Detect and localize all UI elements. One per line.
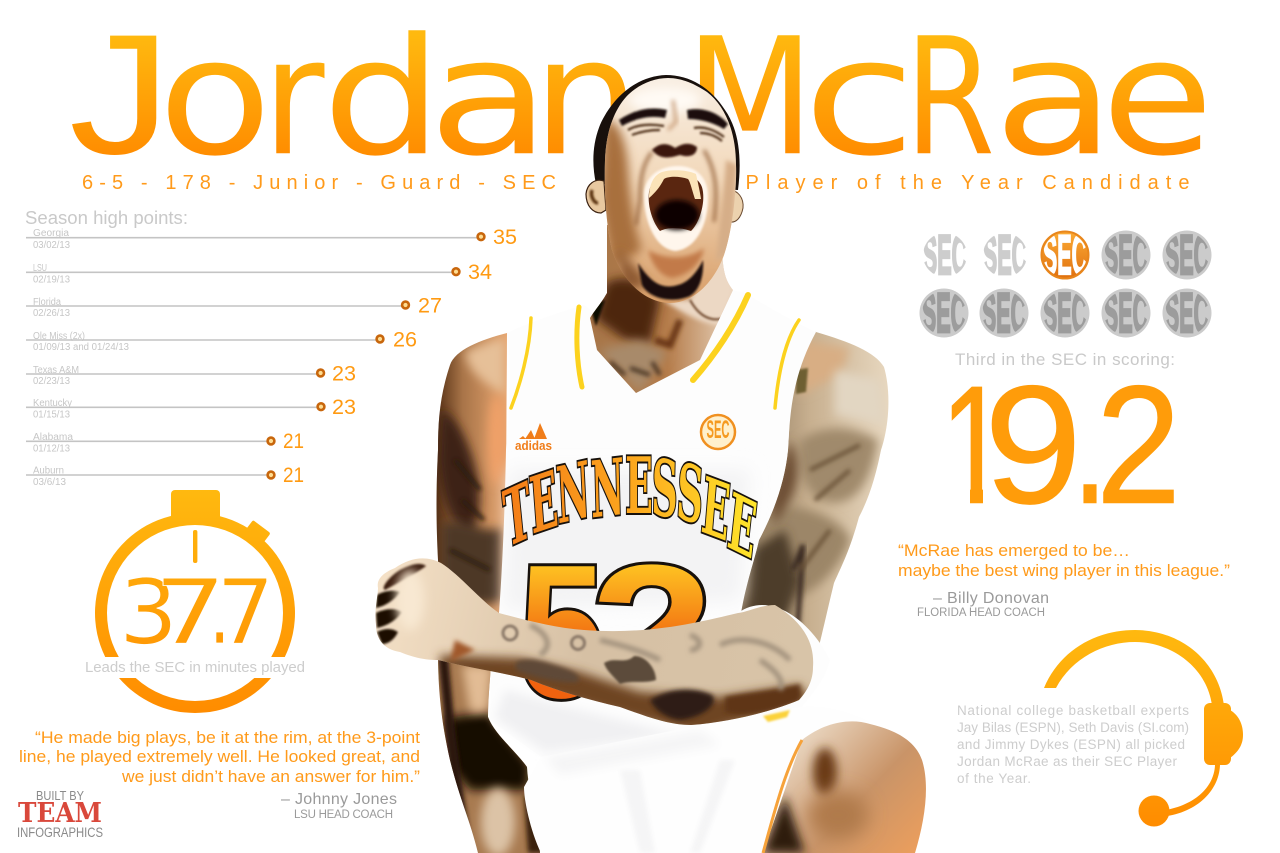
nose shadow <box>652 144 697 157</box>
stat: 37.7: . <box>208 560 231 664</box>
row: Kentucky 23: 23 <box>332 396 356 419</box>
heading: third in SEC: Third in the SEC in scoring: <box>955 350 1175 369</box>
row: Florida 27: 27 <box>418 294 442 318</box>
panel: headset experts <box>957 630 1243 826</box>
stat: 37.7: 7 <box>216 560 274 664</box>
icon: SEC 5: SEC <box>1165 224 1209 286</box>
quote: Johnny Jones <box>19 728 420 821</box>
row: Alabama 21: Alabama <box>33 432 73 443</box>
lips <box>644 166 708 251</box>
illustration: player Jordan McRae <box>375 75 926 853</box>
lower forearm shading <box>440 655 810 735</box>
chin shadow <box>648 248 704 278</box>
row: Auburn 21: 03/6/13 <box>33 477 66 488</box>
right ear <box>727 190 743 222</box>
title: M <box>685 4 814 192</box>
brows <box>619 108 667 126</box>
icon: SEC 3 highlighted: SEC <box>1043 224 1087 286</box>
adidas logo: adidas <box>515 438 552 453</box>
text: experts note: and Jimmy Dykes (ESPN) all picked <box>957 737 1185 752</box>
beard <box>638 260 703 300</box>
panel: SEC icons rank <box>920 230 1212 338</box>
row: Auburn 21: 21 <box>283 464 304 487</box>
row: Auburn 21: Auburn <box>33 466 64 476</box>
forearm tattoos <box>516 659 579 682</box>
jersey SEC patch <box>701 415 735 449</box>
icon: headset <box>1044 630 1243 826</box>
row: Texas A&M 23: Texas A&M <box>33 365 79 376</box>
row: LSU 34: 02/19/13 <box>33 274 70 286</box>
right forearm and fist <box>375 558 813 735</box>
stat: 19.2: 2 <box>1096 351 1181 539</box>
logo: built by team infographics: INFOGRAPHICS <box>17 824 103 840</box>
text: experts note <box>957 703 1189 786</box>
row: Georgia 35: 35 <box>493 226 517 249</box>
row: Florida 27 <box>26 294 442 319</box>
row: Kentucky 23: 01/15/13 <box>33 410 70 420</box>
neck and chest <box>590 225 733 393</box>
row: Florida 27: 02/26/13 <box>33 308 70 319</box>
title: r <box>263 4 325 192</box>
icon: SEC 9: SEC <box>1104 282 1148 344</box>
subtitle right: Player of the Year Candidate <box>746 172 1190 194</box>
quote: Johnny Jones: – Johnny Jones <box>281 791 397 808</box>
title: a <box>993 4 1116 192</box>
stat: 37.7: 3 <box>119 560 178 664</box>
jersey stripes <box>511 295 799 408</box>
title: e <box>1101 4 1214 192</box>
title: a <box>428 4 551 192</box>
jersey SEC patch: SEC <box>706 416 730 444</box>
logo: built by team infographics: BUILT BY <box>36 788 84 803</box>
row: Ole Miss 26: 01/09/13 and 01/24/13 <box>33 342 129 353</box>
shorts <box>524 707 870 853</box>
eyes <box>628 125 664 135</box>
stat: 19.2: . <box>1072 351 1108 539</box>
quote: Johnny Jones: “He made big plays, be it at the rim, at the 3-point <box>35 728 420 747</box>
caption: leads the SEC: Leads the SEC in minutes played <box>85 659 305 676</box>
quote: Billy Donovan: maybe the best wing player in this league.” <box>898 562 1230 580</box>
subtitle left: 6-5 - 178 - Junior - Guard - SEC <box>82 172 556 194</box>
panel: season high points chart <box>25 208 517 488</box>
row: Ole Miss 26: Ole Miss (2x) <box>33 331 85 342</box>
icon: SEC 6: SEC <box>922 282 966 344</box>
row: Alabama 21 <box>26 430 304 454</box>
icon: SEC 8: SEC <box>1043 282 1087 344</box>
adidas logo <box>515 423 552 453</box>
mouth <box>649 170 703 231</box>
jersey number 52: 5 <box>519 526 605 738</box>
stat: 19.2: 9 <box>984 351 1082 539</box>
row: Auburn 21 <box>26 464 304 488</box>
icon: SEC 2: SEC <box>983 224 1027 286</box>
row: Texas A&M 23: 23 <box>332 362 356 386</box>
head <box>586 75 743 303</box>
row: Kentucky 23: Kentucky <box>33 398 72 409</box>
row: LSU 34: LSU <box>33 263 47 274</box>
logo: built by team infographics <box>17 788 103 840</box>
row: Florida 27: Florida <box>33 297 61 308</box>
icon: stopwatch <box>95 490 295 713</box>
stat: 19.2 <box>952 384 1174 505</box>
title: n <box>533 4 640 192</box>
row: LSU 34: 34 <box>468 261 492 284</box>
quote: Johnny Jones: line, he played extremely well. He looked great, and <box>19 747 420 766</box>
row: Georgia 35: 03/02/13 <box>33 240 70 251</box>
quote: Johnny Jones: LSU HEAD COACH <box>294 809 393 821</box>
quote: Johnny Jones: we just didn’t have an answer for him.” <box>121 767 420 786</box>
panel: stopwatch minutes played <box>85 490 305 713</box>
stat: 19.2: 1 <box>940 351 1008 539</box>
text: experts note: Jay Bilas (ESPN), Seth Davis (SI.com) <box>957 720 1189 735</box>
knee <box>763 721 926 853</box>
panel: scoring stat <box>952 353 1174 505</box>
icon: SEC 4: SEC <box>1104 224 1148 286</box>
title: c <box>803 4 916 192</box>
text: experts note: of the Year. <box>957 771 1031 786</box>
logo: built by team infographics: TEAM <box>18 798 102 829</box>
title: o <box>158 4 272 192</box>
row: Georgia 35 <box>26 226 517 251</box>
icon: SEC 1: SEC <box>923 224 967 286</box>
icon: SEC 7: SEC <box>982 282 1026 344</box>
row: Texas A&M 23 <box>26 362 356 387</box>
jersey TENNESSEE lettering: TENNESSEE <box>500 441 760 578</box>
row: Ole Miss 26: 26 <box>393 328 417 352</box>
jersey number 52: 2 <box>590 526 714 738</box>
text: experts note: Jordan McRae as their SEC Player <box>957 754 1178 769</box>
stat: 37.7: 7 <box>154 560 227 664</box>
hair <box>593 75 740 190</box>
row: Ole Miss 26 <box>26 328 417 353</box>
title: J <box>69 0 172 190</box>
left lower arm <box>438 650 545 853</box>
quote: Billy Donovan: – Billy Donovan <box>933 590 1049 607</box>
row: Alabama 21: 01/12/13 <box>33 444 70 454</box>
heading: season high points: Season high points: <box>25 208 188 228</box>
row: Texas A&M 23: 02/23/13 <box>33 376 70 387</box>
fingers <box>384 564 426 590</box>
face <box>605 78 736 303</box>
quote: Billy Donovan <box>898 542 1230 619</box>
row: LSU 34 <box>26 261 492 286</box>
title: d <box>322 4 443 192</box>
row: Kentucky 23 <box>26 396 356 420</box>
title: R <box>905 4 995 192</box>
quote: Billy Donovan: FLORIDA HEAD COACH <box>917 607 1045 619</box>
text: experts note: National college basketball experts <box>957 703 1189 718</box>
right upper arm with tattoos <box>740 332 888 667</box>
quote: Billy Donovan: “McRae has emerged to be… <box>898 542 1130 560</box>
left ear <box>586 180 606 213</box>
icon: SEC 10: SEC <box>1165 282 1209 344</box>
row: Georgia 35: Georgia <box>33 228 69 239</box>
jersey <box>490 290 830 757</box>
row: Alabama 21: 21 <box>283 430 304 453</box>
left upper arm with tattoos <box>436 333 507 620</box>
